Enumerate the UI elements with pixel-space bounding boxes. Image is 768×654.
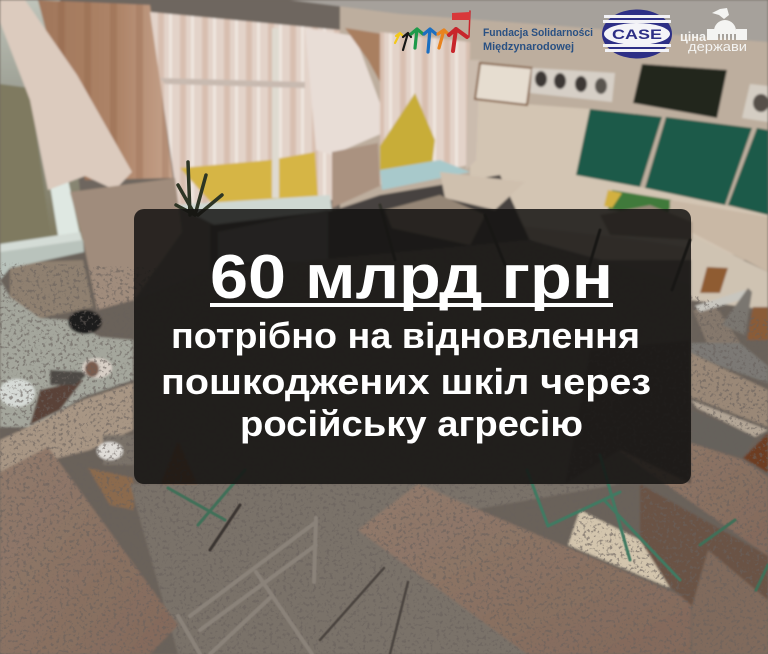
right side cream band — [670, 200, 768, 272]
overturned chair brown — [88, 468, 134, 510]
floor bottom — [130, 484, 620, 654]
left window — [0, 0, 85, 262]
grain over photo — [0, 262, 768, 654]
subtitle text — [161, 315, 651, 444]
right window — [380, 32, 470, 185]
left bluish debris — [0, 280, 133, 427]
logo: CASE: CASE — [612, 26, 662, 42]
logo: ціна держави: ціна — [680, 29, 707, 44]
lower left desk — [0, 447, 178, 654]
plant — [176, 162, 222, 215]
calendar — [475, 63, 532, 105]
headline: 60 млрд грн: 60 млрд грн — [210, 243, 613, 312]
lower left wall — [70, 178, 182, 310]
sheer curtain left — [0, 0, 132, 190]
under right desk shadow — [640, 484, 768, 606]
center wreckage — [565, 340, 691, 484]
portrait right — [742, 84, 768, 122]
right lower desk — [620, 416, 768, 556]
chalkboards — [576, 109, 662, 187]
icon: coloured arrows and flag — [395, 11, 470, 52]
logo: CASE — [602, 10, 672, 58]
corner teacher desk — [440, 172, 525, 210]
logo: ціна держави: держави — [688, 39, 747, 54]
tv screen — [633, 64, 727, 118]
portraits — [530, 68, 615, 102]
floor — [0, 240, 768, 654]
organisation name: Fundacja Solidarności — [483, 27, 593, 39]
subtitle text: російську агресію — [240, 403, 583, 444]
green chair at board — [608, 190, 672, 215]
back desk tops — [385, 195, 485, 245]
icon: building — [707, 8, 747, 40]
logo: Fundacja Solidarności Międzynarodowej — [395, 11, 593, 53]
far lower right desk — [692, 550, 768, 654]
plaster slab — [0, 383, 133, 472]
radiator zone — [210, 175, 530, 270]
right big desk — [691, 353, 768, 427]
ceiling and back wall — [340, 0, 768, 260]
dark text panel — [134, 209, 691, 484]
subtitle text: потрібно на відновлення — [171, 315, 640, 356]
organisation name — [483, 27, 593, 53]
sheer middle right — [305, 28, 390, 155]
center desk — [358, 484, 691, 654]
brown curtain left — [38, 0, 173, 180]
pier wall — [332, 143, 380, 208]
middle window — [150, 12, 340, 205]
organisation name: Międzynarodowej — [483, 41, 574, 53]
chair frames — [168, 205, 768, 654]
subtitle text: пошкоджених шкіл через — [161, 361, 651, 402]
left rubble block — [10, 260, 93, 318]
brown curtain right — [345, 28, 395, 100]
window sill — [175, 195, 332, 225]
fallen metal frame — [178, 518, 316, 654]
logo: ціна держави — [680, 8, 747, 54]
